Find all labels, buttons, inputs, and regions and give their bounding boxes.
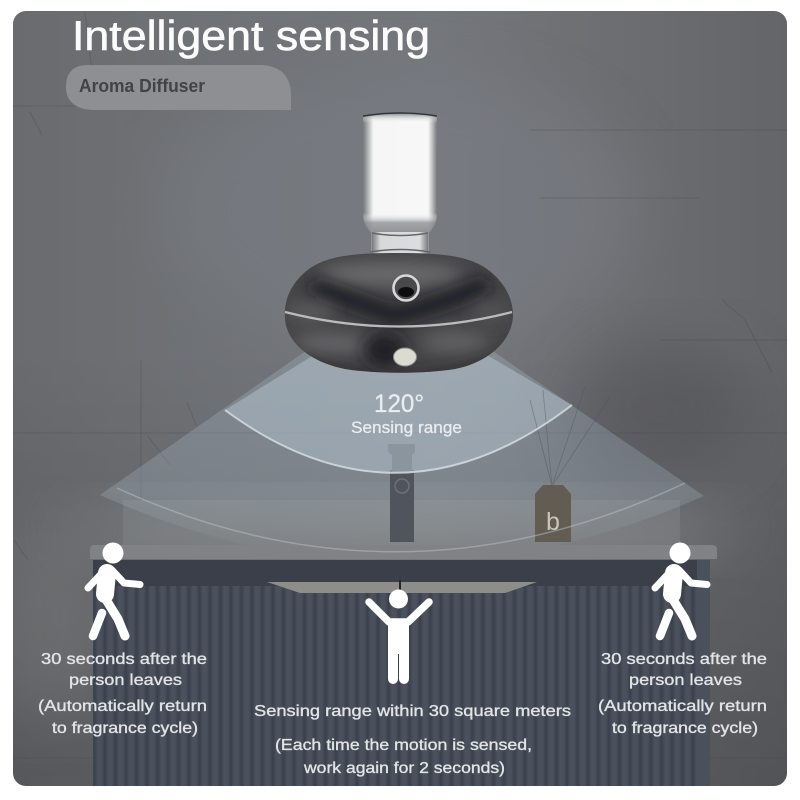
product tag xyxy=(66,65,291,110)
icon: person with raised arms xyxy=(369,590,429,679)
icon: walking person left xyxy=(88,542,140,636)
right caption xyxy=(598,651,767,737)
sink basin xyxy=(123,500,680,546)
right caption: to fragrance cycle) xyxy=(612,720,758,737)
aroma diffuser device xyxy=(285,113,513,385)
left caption: 30 seconds after the xyxy=(41,651,207,668)
center caption: work again for 2 seconds) xyxy=(303,760,505,777)
faucet xyxy=(388,444,415,542)
sensing cone xyxy=(100,352,704,530)
cabinet xyxy=(93,560,710,786)
inner range arc xyxy=(225,405,572,473)
right caption: person leaves xyxy=(629,672,742,689)
reed diffuser: b xyxy=(546,508,560,536)
device body xyxy=(285,253,513,385)
left caption: person leaves xyxy=(69,672,182,689)
silver seam xyxy=(285,312,512,326)
angle label: 120° xyxy=(374,390,424,418)
outer range arc xyxy=(117,483,685,552)
wall tile lines and cracks xyxy=(13,12,787,560)
left caption xyxy=(38,651,207,737)
cabinet handle xyxy=(267,580,537,594)
center caption: (Each time the motion is sensed, xyxy=(275,737,532,754)
title: Intelligent sensing xyxy=(72,12,430,59)
reed diffuser xyxy=(530,387,594,542)
glass bottle xyxy=(363,113,437,255)
center caption xyxy=(254,703,571,777)
angle label: Sensing range xyxy=(351,418,462,437)
product tag: Aroma Diffuser xyxy=(79,75,205,96)
right caption: 30 seconds after the xyxy=(601,651,767,668)
button xyxy=(394,348,416,366)
center caption: Sensing range within 30 square meters xyxy=(254,703,571,720)
sensor hole xyxy=(394,276,418,300)
left caption: to fragrance cycle) xyxy=(52,720,198,737)
angle label xyxy=(351,390,462,437)
icon: walking person right xyxy=(655,542,707,636)
countertop shelf xyxy=(90,545,717,559)
left caption: (Automatically return xyxy=(38,698,207,715)
inner sensing sector xyxy=(225,345,572,473)
right caption: (Automatically return xyxy=(598,698,767,715)
